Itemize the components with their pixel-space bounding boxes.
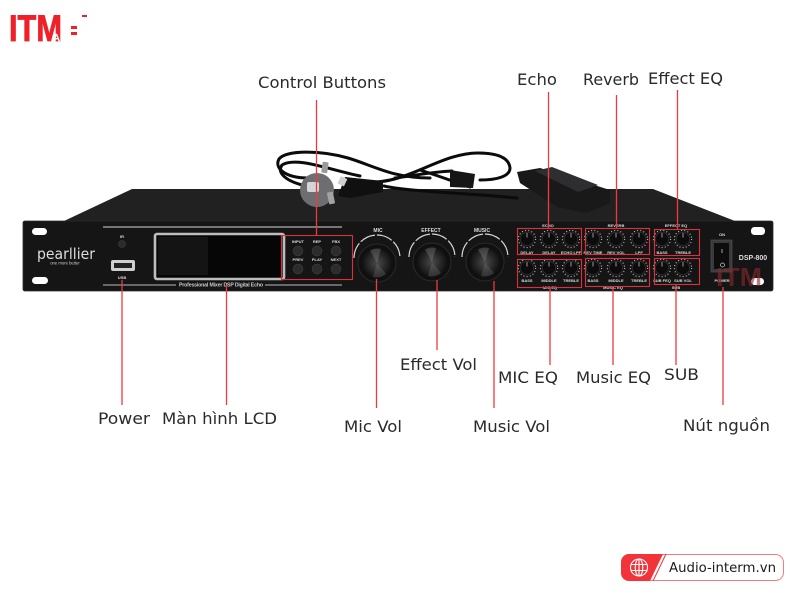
knob captions: SUB [672,285,680,290]
rack holes [32,227,765,285]
control buttons: PREV [293,257,304,262]
front panel [23,221,773,291]
knob captions: LPF [635,250,643,255]
knob captions: SUB FEQ [653,278,671,283]
knob captions: DELAY [542,250,556,255]
knob captions: MIDDLE [608,278,624,283]
brand: one more better [50,260,80,266]
control buttons: FBX [332,239,340,244]
device: rack unit with cable and remote [23,152,773,292]
model name: DSP-800 [739,255,767,262]
knob captions: BASS [521,278,533,283]
knob captions: TREBLE [675,250,691,255]
logo: ITM: ITM [9,8,62,49]
plug right [450,170,475,188]
control buttons: INPUT [292,239,305,244]
knob captions [520,223,692,290]
knob captions: TREBLE [563,278,579,283]
knob captions: REV TIME [584,250,603,255]
power cable [278,152,517,198]
IR sensor [118,234,126,248]
plug left [300,162,383,207]
knob captions: REV VOL [607,250,625,255]
leader lines [122,90,723,408]
knob captions: MUSIC EQ [603,285,623,290]
small knobs [518,230,692,277]
knob captions: REVERB [608,223,624,228]
icon: globe [630,559,648,576]
knob captions: TREBLE [631,278,647,283]
label: SUB: SUB [664,365,699,384]
control buttons: REP [313,239,321,244]
power switch: ON [719,232,725,237]
label: Mic Vol: Mic Vol [344,417,402,436]
watermark: ITM [716,262,762,292]
brand: pearllier [37,245,96,263]
knob captions: BASS [587,278,599,283]
label: Power: Power [98,409,150,428]
label: Effect EQ: Effect EQ [648,69,723,88]
knob captions: SUB VOL [674,278,692,283]
power switch [711,232,732,283]
big knobs: EFFECT [421,228,441,234]
knob captions: ECHO [542,223,554,228]
label: Nút nguồn: Nút nguồn [683,416,770,435]
badge: website [621,554,784,581]
USB port: USB [118,275,126,280]
knob captions: ECHO LPF [561,250,582,255]
LCD display [155,234,284,279]
logo: ITM: A [53,33,60,44]
knob captions: DELAY [520,250,534,255]
power switch: POWER [714,278,730,283]
knob captions: BASS [656,250,668,255]
knob captions: MIC EQ [543,285,557,290]
remote control [517,167,610,213]
label: Music Vol: Music Vol [473,417,550,436]
chassis top [64,189,735,221]
IR sensor: IR [120,234,124,239]
control buttons: PLAY [312,257,322,262]
USB port [111,260,135,280]
label: Effect Vol: Effect Vol [400,355,477,374]
label: Reverb: Reverb [583,70,639,89]
website text: Audio-interm.vn [669,561,776,576]
big knobs [354,228,508,282]
label: Màn hình LCD: Màn hình LCD [162,409,277,428]
knob captions: MIDDLE [541,278,557,283]
label: MIC EQ: MIC EQ [498,368,558,387]
panel caption: Professional Mixer DSP Digital Echo [179,282,263,288]
big knobs: MIC [373,228,383,234]
control buttons: NEXT [331,257,342,262]
control buttons [292,239,342,274]
knob captions: EFFECT EQ [665,223,687,228]
label: Music EQ: Music EQ [576,368,651,387]
label: Control Buttons: Control Buttons [258,73,386,92]
label: Echo: Echo [517,70,557,89]
big knobs: MUSIC [474,228,490,234]
callout boxes [282,228,700,288]
